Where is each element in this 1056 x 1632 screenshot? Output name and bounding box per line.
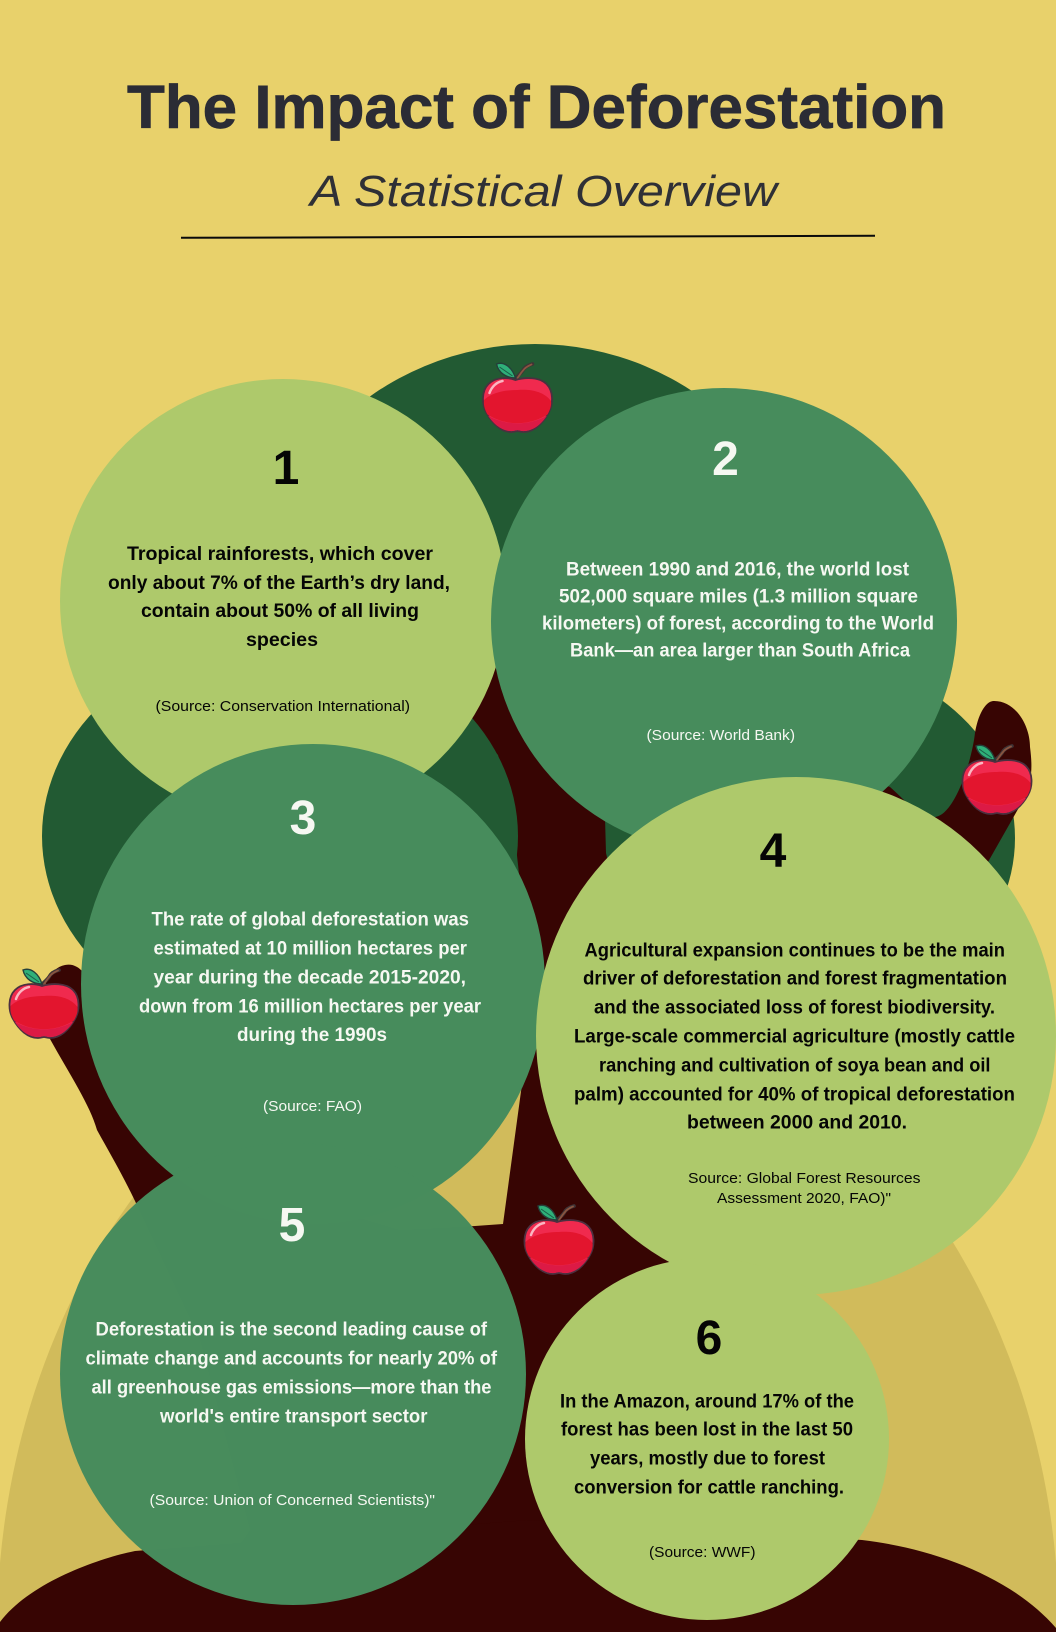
circle 4 [536,777,1056,1295]
apple: left [9,969,79,1038]
panel 5 [60,1143,526,1605]
apple: right [962,745,1032,814]
circle 3 [81,744,545,1224]
foliage: right back [605,658,1015,1018]
ground mound [0,1520,1056,1632]
panel 3 [81,744,545,1224]
statement 5: world's entire transport sector [159,1406,428,1428]
source 4: Assessment 2020, FAO)" [717,1190,891,1207]
statement 4: Agricultural expansion continues to be the main [584,940,1005,962]
apple: lower centre [524,1205,594,1274]
statement 3: The rate of global deforestation was [152,908,469,930]
tree illustration [0,344,1056,1632]
statement 5: Deforestation is the second leading cause of [96,1318,487,1340]
panel 2 [491,388,957,854]
source 1: (Source: Conservation International) [156,698,410,715]
source 4: Source: Global Forest Resources [688,1170,920,1187]
foliage: left [42,636,518,1036]
statement 3: down from 16 million hectares per year [139,996,481,1018]
foliage: top [247,344,823,924]
statement 2: kilometers) of forest, according to the World [542,612,934,634]
statement 1 [108,543,450,651]
number 4: 4 [760,825,787,878]
statement 5 [86,1318,497,1428]
statement 1: species [246,629,318,651]
circle 1 [60,379,506,823]
statement 2: 502,000 square miles (1.3 million square [559,586,918,608]
source 6: (Source: WWF) [649,1544,756,1561]
circle 5 [60,1143,526,1605]
number 3: 3 [290,792,316,845]
statement 6 [560,1390,854,1498]
source 3: (Source: FAO) [263,1098,362,1115]
foliage: right lobe [820,640,975,817]
statement 5: all greenhouse gas emissions—more than the [92,1376,492,1398]
source 4 [688,1170,920,1207]
number 6: 6 [696,1312,722,1365]
statement 2: Between 1990 and 2016, the world lost [566,558,909,580]
title: The Impact of Deforestation [127,73,946,141]
panel 4 [536,777,1056,1295]
statement 3: during the 1990s [237,1024,387,1046]
statement 6: forest has been lost in the last 50 [561,1418,853,1440]
source 2: (Source: World Bank) [646,727,795,744]
source 5: (Source: Union of Concerned Scientists)" [150,1492,435,1509]
statement 6: years, mostly due to forest [590,1448,825,1470]
statement 3: year during the decade 2015-2020, [154,966,466,988]
statement 4 [574,940,1015,1134]
statement 4: ranching and cultivation of soya bean and oil [599,1054,990,1076]
statement 5: climate change and accounts for nearly 20% of [86,1348,497,1370]
circle 6 [525,1258,889,1620]
statement 2: Bank—an area larger than South Africa [570,640,910,662]
statement 1: only about 7% of the Earth’s dry land, [108,572,450,594]
statement 4: between 2000 and 2010. [687,1112,907,1134]
right branch [700,701,1031,1180]
number 1: 1 [273,442,299,495]
apple: top [483,363,552,432]
statement 1: contain about 50% of all living [141,600,419,622]
statement 4: driver of deforestation and forest fragmentation [583,968,1007,990]
statement 3 [139,908,481,1046]
trunk and branches [41,640,880,1632]
statement 1: Tropical rainforests, which cover [127,543,433,565]
subtitle: A Statistical Overview [307,167,781,216]
number 5: 5 [279,1199,305,1252]
statement 4: and the associated loss of forest biodiversity. [594,996,995,1018]
circle 2 [491,388,957,854]
statement 4: palm) accounted for 40% of tropical deforestation [574,1084,1015,1106]
statement 6: In the Amazon, around 17% of the [560,1390,854,1412]
hill [0,982,1056,1632]
panel 1 [60,379,506,823]
statement 2 [542,558,934,662]
statement 6: conversion for cattle ranching. [574,1476,844,1498]
statement 3: estimated at 10 million hectares per [154,938,467,960]
panel 6 [525,1258,889,1620]
statement 4: Large-scale commercial agriculture (mostly cattle [574,1026,1015,1048]
number 2: 2 [712,433,739,486]
